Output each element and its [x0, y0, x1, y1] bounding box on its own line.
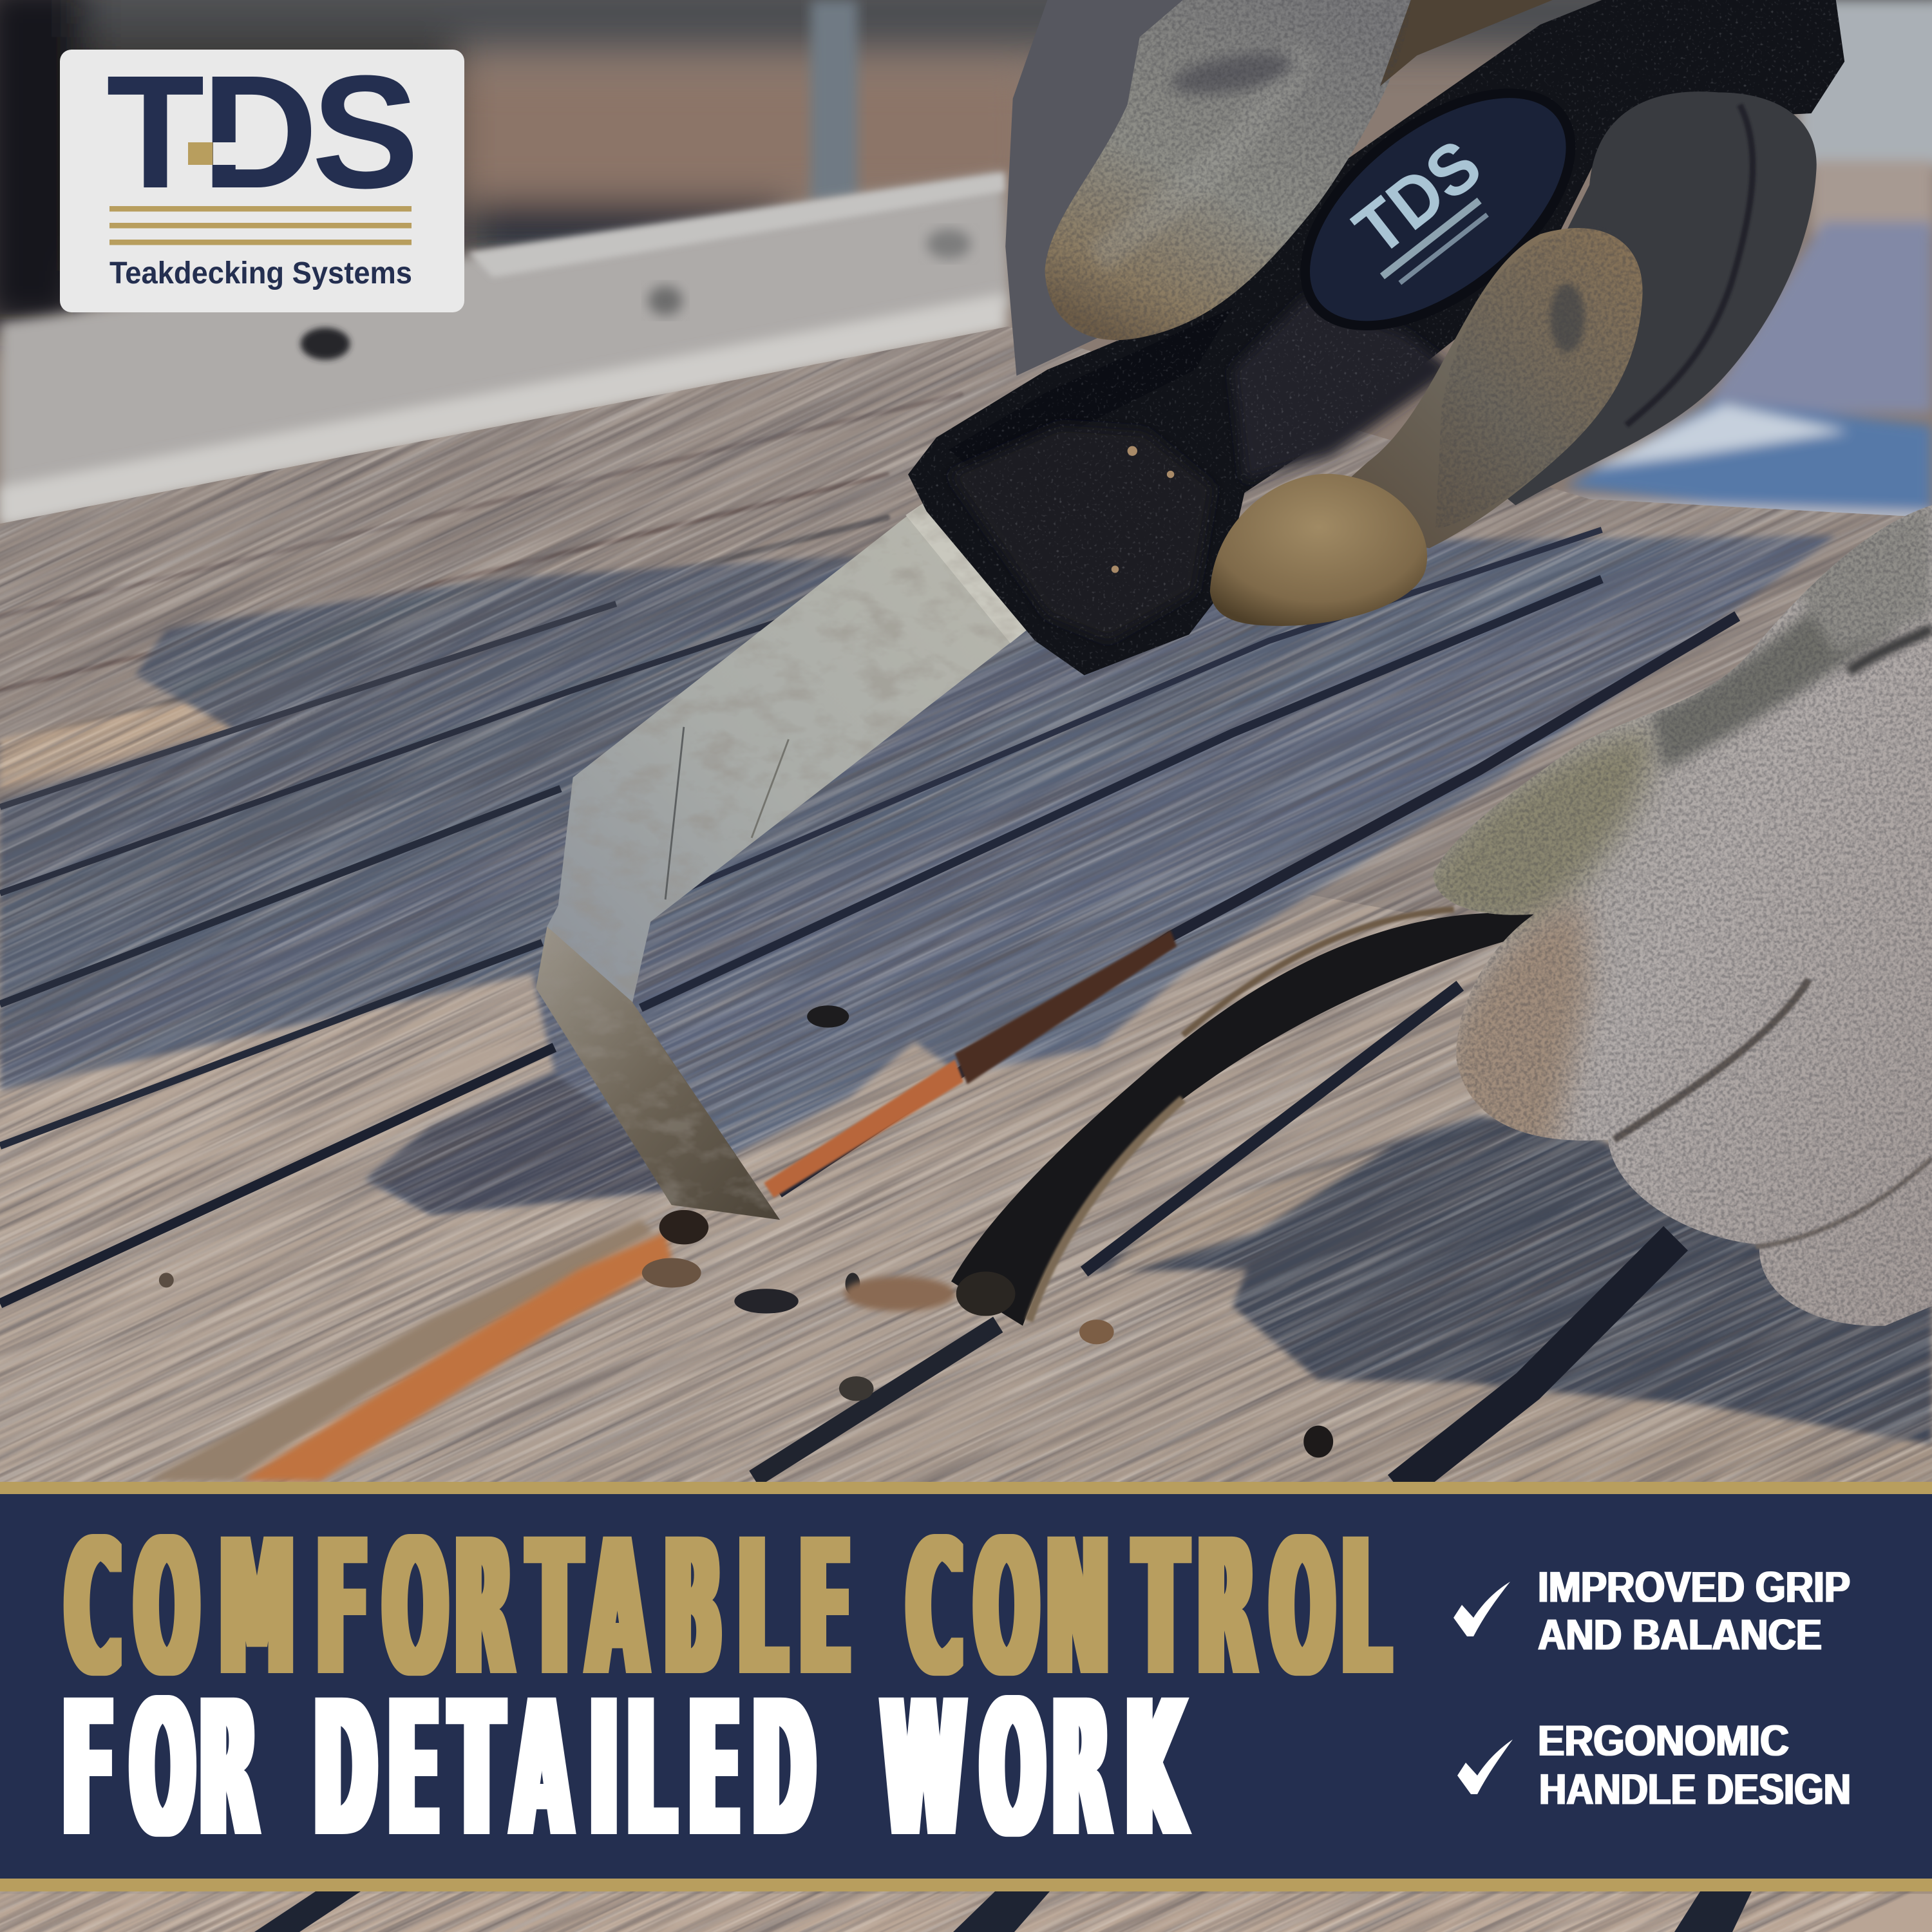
headline: COMFORTABLE CONTROL — [66, 1500, 1390, 1718]
fingers wrapping handle back — [1454, 91, 1817, 505]
benefit 1: AND BALANCE — [1538, 1610, 1822, 1659]
logo wordmark TDS: TDS — [106, 42, 419, 222]
benefit 2: ERGONOMIC — [1538, 1716, 1789, 1765]
logo gold lines — [109, 206, 412, 245]
knife handle — [905, 0, 1848, 677]
handle badge: TDS — [1340, 124, 1495, 270]
dark finger behind top — [1380, 0, 1553, 86]
white boat side — [0, 173, 1010, 524]
benefit 1: IMPROVED GRIP — [1538, 1562, 1850, 1611]
bottom wood strip base — [0, 1894, 1932, 1932]
banner — [0, 1482, 1932, 1891]
icon: check 2 — [1457, 1739, 1513, 1794]
far plank stripes — [0, 394, 961, 746]
bottom wood seams — [254, 1891, 1752, 1932]
upper glove palm — [1005, 0, 1244, 376]
blurred marina background — [0, 0, 1932, 567]
debris — [159, 1005, 1333, 1457]
banner bottom gold rule — [0, 1879, 1932, 1891]
orange stain — [148, 931, 1177, 1481]
index finger — [1045, 0, 1411, 340]
benefit 1 — [1538, 1562, 1850, 1659]
lower right glove — [1417, 505, 1932, 1326]
tool blade — [530, 493, 1035, 1226]
banner navy field — [0, 1494, 1932, 1879]
handle specks — [1112, 446, 1174, 573]
logo name: Teakdecking Systems — [109, 256, 412, 290]
banner top gold rule — [0, 1482, 1932, 1494]
middle finger on handle — [1306, 228, 1643, 548]
caulk strip — [951, 909, 1534, 1326]
benefit 2: HANDLE DESIGN — [1539, 1765, 1851, 1814]
cast shadow of tool and hand — [0, 536, 1836, 1214]
sunlit wood — [0, 895, 1932, 1894]
icon: check 1 — [1454, 1582, 1510, 1636]
knit texture on gloves — [1035, 0, 1932, 1331]
headline — [62, 1500, 1390, 1879]
right background — [1528, 0, 1932, 542]
thumb ball — [1210, 474, 1427, 626]
headline: FOR DETAILED WORK — [62, 1661, 1186, 1879]
logo card — [60, 42, 464, 312]
seams — [0, 530, 1738, 1488]
handle badge — [1257, 41, 1619, 378]
benefit 2 — [1538, 1716, 1851, 1814]
